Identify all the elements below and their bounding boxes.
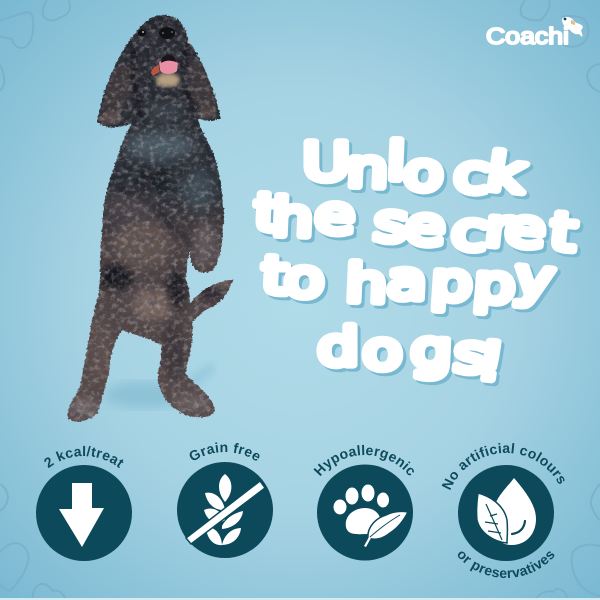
icon: jumping dog — [562, 17, 583, 37]
badge: no artificial colours or preservatives — [442, 443, 564, 578]
headline — [0, 0, 579, 393]
photo: standing dog — [67, 14, 234, 422]
dog ground shadow — [103, 362, 215, 408]
line: Unlock: Unlock — [302, 130, 530, 205]
line: dogs!: dogs! — [318, 316, 508, 393]
label: Hypoallergenic — [314, 444, 414, 476]
badge: 2 kcal/treat — [36, 446, 132, 561]
foreleg crease — [118, 190, 190, 250]
logo: Coachi — [486, 17, 583, 49]
brown belly and leg fur — [70, 221, 231, 417]
badge: hypoallergenic — [314, 444, 414, 560]
icon: wheat with slash — [186, 474, 265, 545]
dog body silhouette — [67, 14, 234, 422]
icon: drop and leaf — [492, 478, 536, 545]
logo: Coachi: Coachi — [486, 23, 569, 49]
label: bottom: or preservatives — [458, 552, 554, 578]
label: 2 kcal/treat — [44, 446, 124, 468]
bottom edge strip — [0, 598, 600, 600]
label: top: No artificial colours — [442, 443, 564, 490]
dog face — [138, 27, 191, 87]
icon: down arrow — [59, 483, 104, 547]
blue-grey chest fur — [104, 104, 214, 222]
icon: paw and feather — [334, 484, 408, 547]
ear fur — [99, 48, 222, 124]
label: Grain free — [190, 442, 260, 461]
badge: grain free — [177, 442, 273, 558]
